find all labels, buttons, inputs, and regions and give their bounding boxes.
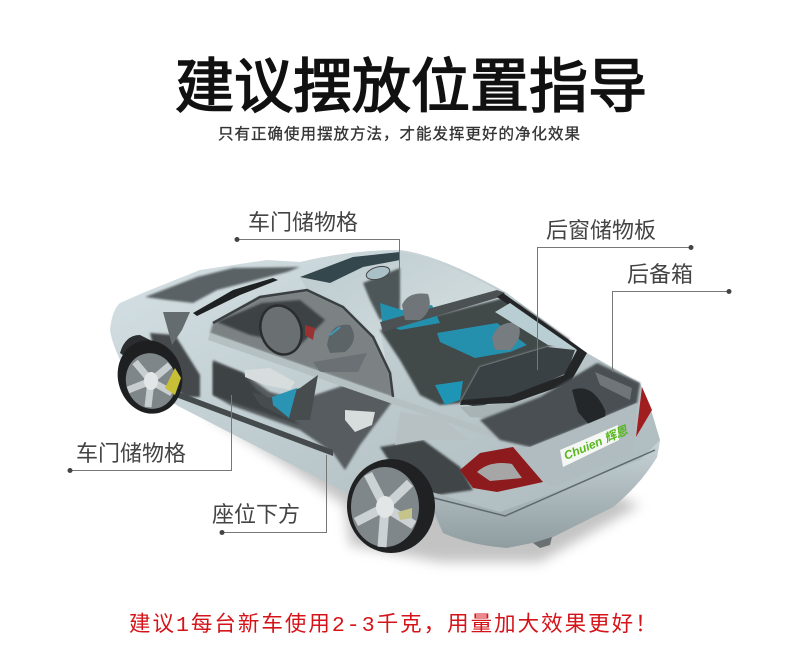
seat base: [313, 353, 367, 372]
leader: rear shelf: [538, 245, 694, 370]
sunroof: [300, 252, 400, 283]
quarter panel pale: [395, 412, 470, 445]
front seat cushion: [252, 375, 318, 420]
leader: trunk: [612, 289, 732, 372]
cabin interior: [210, 290, 393, 397]
label: door storage top: 车门储物格: [248, 210, 358, 235]
bumper: [425, 440, 660, 548]
dark arch edge: [213, 290, 393, 397]
fender arch: [120, 335, 160, 360]
parcel shelf: [460, 347, 575, 407]
engine bay: [145, 267, 300, 303]
door sill: [173, 390, 333, 456]
label: rear shelf: 后窗储物板: [546, 218, 656, 243]
number plate: Chuien 辉恩: [562, 423, 631, 463]
rear deck band: [460, 362, 615, 420]
blue right rear seat: [437, 323, 527, 358]
trunk opening: [480, 363, 640, 447]
tail light left: [460, 447, 543, 492]
mirror: [365, 264, 391, 282]
roof and windshield glass: [300, 252, 520, 397]
interior behind windshield: [363, 268, 400, 320]
leader: under seat: [220, 455, 326, 535]
dashboard screen: [305, 325, 315, 340]
front headrest: [327, 325, 354, 353]
label: trunk: 后备箱: [627, 262, 693, 287]
leader: upper door storage: [234, 237, 400, 300]
car body: [110, 250, 660, 548]
rear cabin: [380, 298, 570, 405]
rear glass: [495, 303, 576, 349]
leader: lower door storage: [68, 395, 232, 473]
front wheel: [110, 333, 190, 421]
title: 建议摆放位置指导: [175, 54, 647, 120]
spare tyre: [572, 388, 605, 428]
seat cushion blue: [435, 381, 463, 405]
headrest right: [492, 323, 520, 350]
exhaust: [533, 537, 552, 548]
rear suspension: [380, 440, 473, 497]
lower door interior: [213, 360, 392, 470]
strut: [163, 312, 190, 345]
rear window frame: [460, 293, 587, 405]
label: door storage bottom: 车门储物格: [76, 441, 186, 466]
trunk lid: [503, 403, 637, 487]
belt line glass: [208, 333, 520, 447]
subtitle: 只有正确使用摆放方法，才能发挥更好的净化效果: [218, 126, 581, 143]
blue left rear seat: [380, 303, 440, 330]
rear wheel: [347, 459, 435, 553]
steering wheel: [254, 300, 308, 360]
suspension mesh: [150, 333, 200, 397]
tail light right: [636, 387, 652, 437]
trunk highlight: [595, 372, 632, 400]
headrest left: [402, 293, 430, 320]
ground shadow: [205, 400, 640, 562]
front seat blue: [272, 388, 297, 418]
door hardware: [245, 368, 375, 432]
pillar bar: [380, 290, 505, 332]
footer note: 建议1每台新车使用2-3千克，用量加大效果更好！: [129, 614, 659, 638]
label: under seat: 座位下方: [212, 502, 300, 527]
